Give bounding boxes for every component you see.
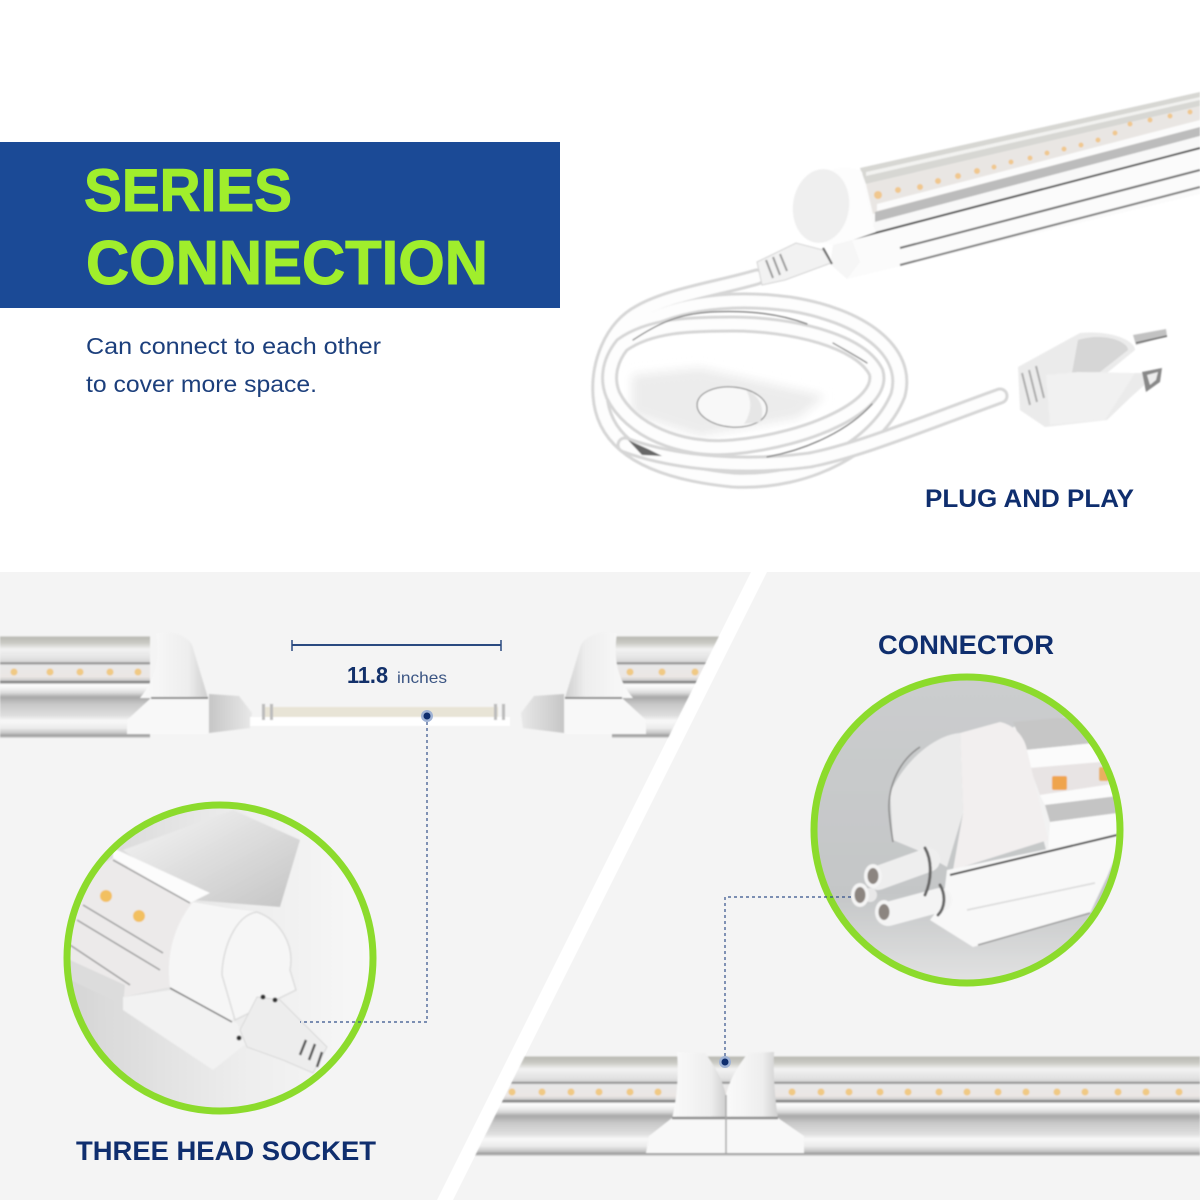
description text: [86, 333, 381, 397]
left socket and plug: [127, 632, 252, 734]
dimension: 11.8 inches: [292, 640, 501, 688]
dimension: 11.8 inches: inches: [397, 670, 447, 687]
inline switch: [695, 384, 769, 430]
switch housing shading: [632, 368, 825, 436]
LEDs on lamp: [874, 110, 1192, 199]
description text: to cover more space.: [86, 371, 317, 397]
callout line: cable to three head socket: [300, 710, 433, 1022]
label: plug and play: PLUG AND PLAY: [925, 485, 1134, 513]
connecting cable: [250, 704, 510, 726]
heading banner: CONNECTION: [86, 229, 488, 298]
left panel tube sections: [0, 636, 742, 738]
dimension: 11.8 inches: 11.8: [347, 662, 388, 688]
product photo: lamp with corded plug: [600, 92, 1200, 480]
wall plug: [1018, 329, 1167, 427]
inset circle: connector: [810, 672, 1125, 988]
lamp end cap: [788, 165, 876, 279]
heading banner: SERIES: [84, 157, 292, 224]
heading banner: [0, 142, 560, 308]
center sockets: [646, 1052, 804, 1153]
bottom tube: [460, 1056, 1200, 1156]
product photo: two lamps joined by cable: [0, 632, 742, 738]
product photo: two lamps joined end to end: [460, 1052, 1200, 1156]
inset circle: three head socket: [60, 800, 380, 1120]
label: connector: CONNECTOR: [878, 630, 1054, 660]
coiled cord: [600, 277, 1000, 480]
right socket and plug: [521, 632, 646, 734]
callout line: joint to connector: [719, 897, 852, 1068]
cord connector into lamp: [757, 243, 832, 285]
tube body: [833, 92, 1200, 279]
panel: bottom grey section: [0, 572, 1200, 1200]
label: three head socket: THREE HEAD SOCKET: [76, 1136, 377, 1166]
diagonal white divider: [437, 572, 767, 1200]
description text: Can connect to each other: [86, 333, 381, 359]
